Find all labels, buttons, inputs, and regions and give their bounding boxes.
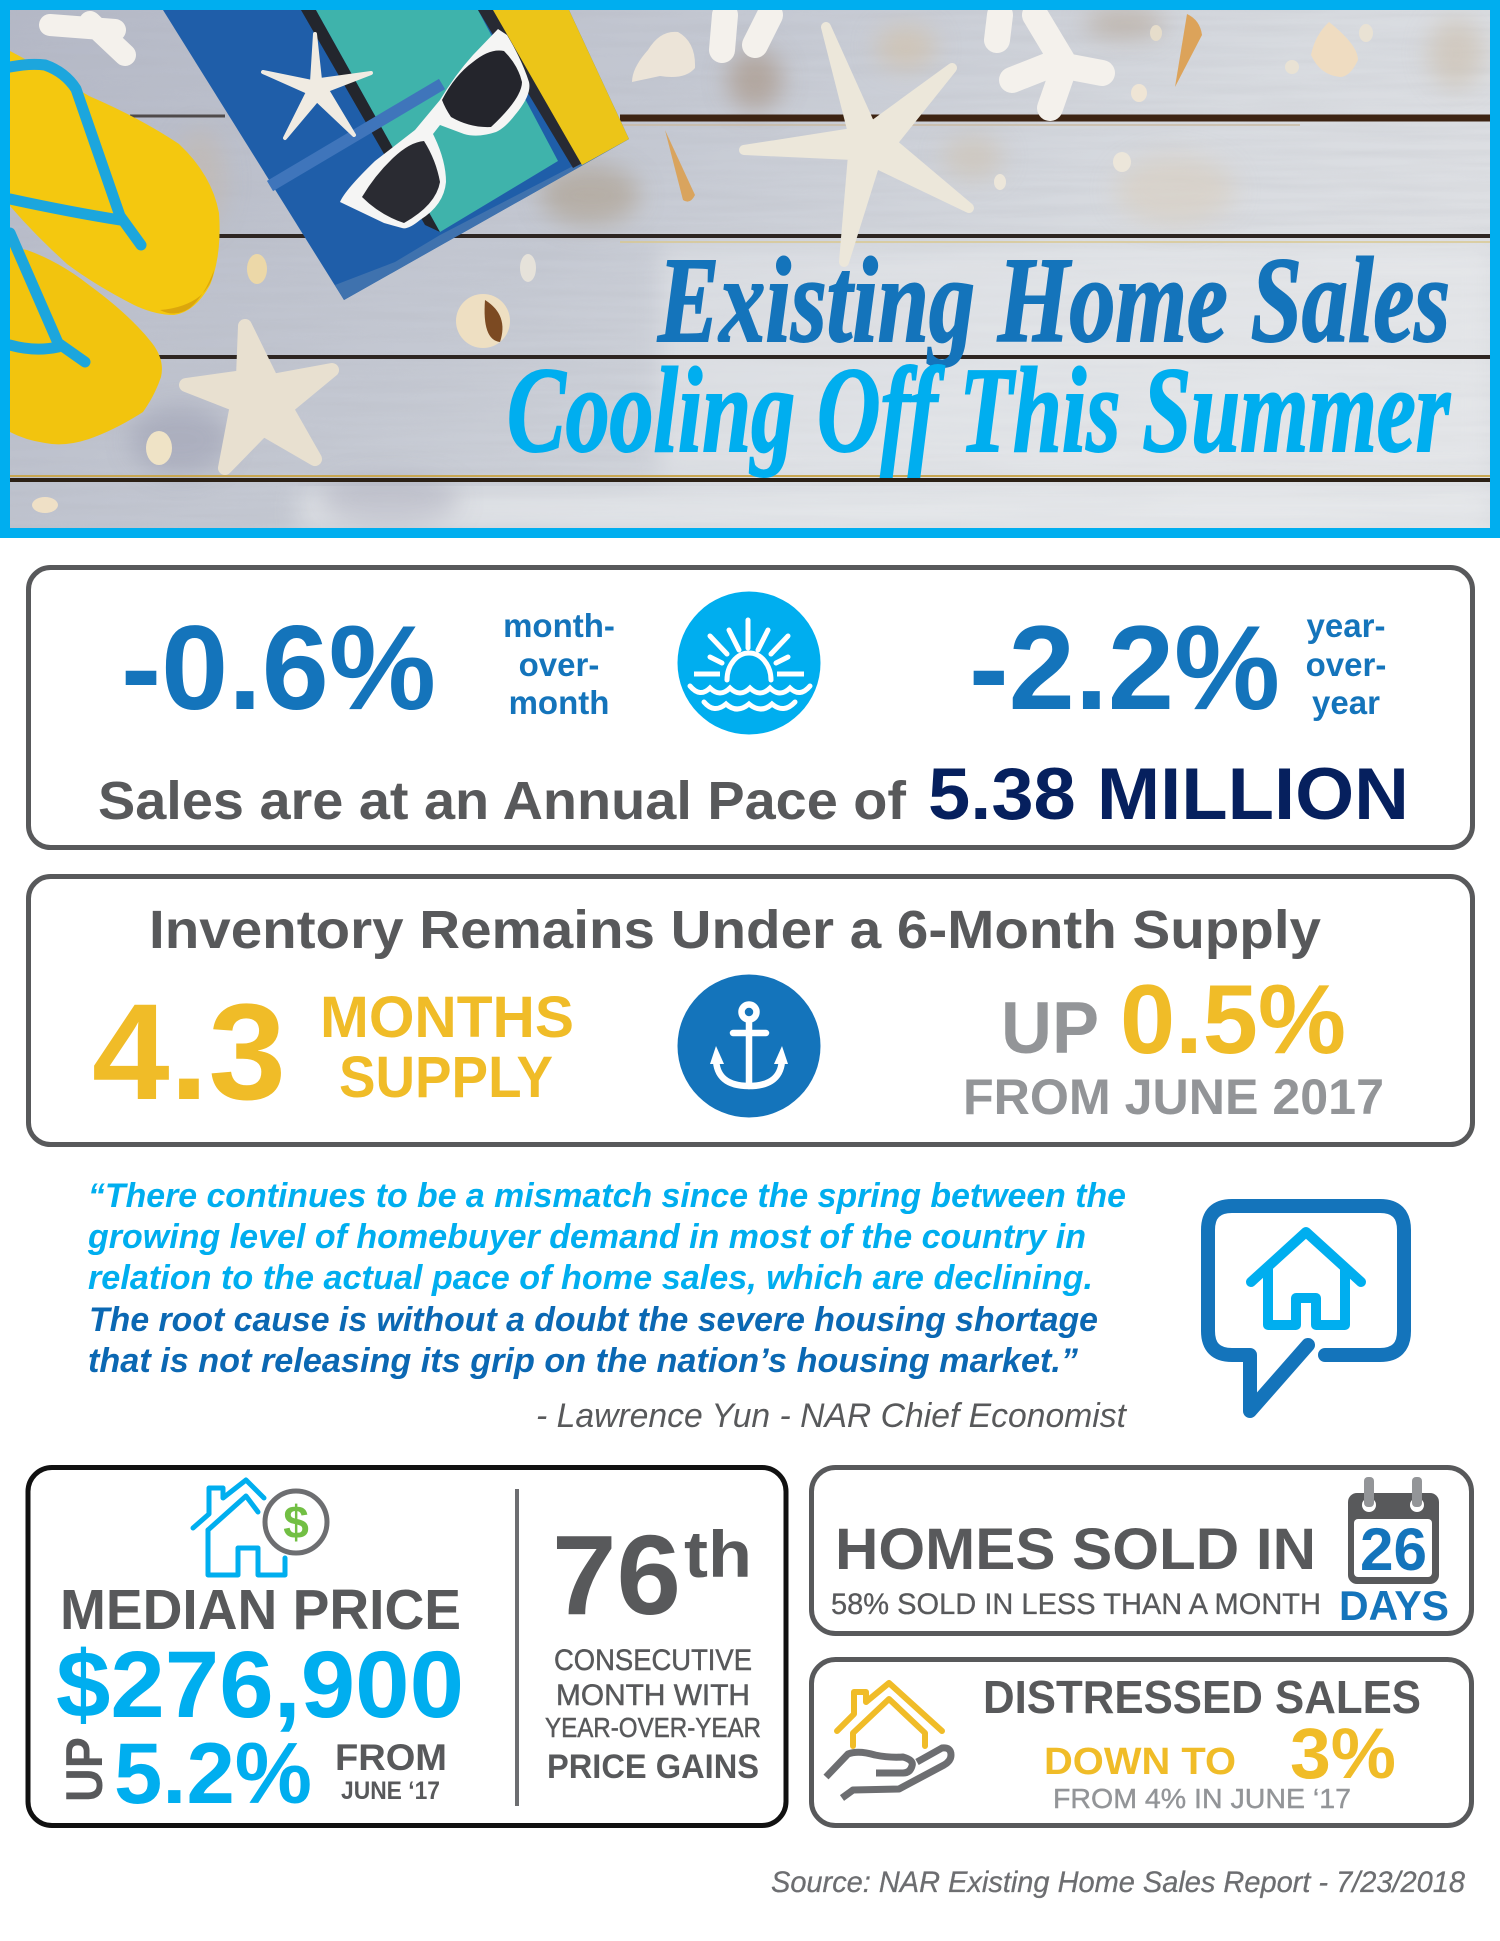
text: annual pace: Sales are at an Annual Pace of bbox=[98, 771, 907, 831]
starfish large bbox=[744, 27, 969, 262]
label: month-over-month: month bbox=[509, 684, 609, 721]
shells bbox=[32, 14, 1373, 513]
label: days: DAYS bbox=[1339, 1582, 1449, 1629]
towel bbox=[163, 10, 629, 300]
label: month-over-month: month- bbox=[503, 607, 615, 644]
icon: speech bubble with house bbox=[1208, 1206, 1404, 1411]
text: from 4%: FROM 4% IN JUNE ‘17 bbox=[1053, 1783, 1351, 1814]
label: months supply: SUPPLY bbox=[339, 1045, 553, 1110]
quote: The root cause is without a doubt the severe housing shortage bbox=[89, 1301, 1098, 1339]
icon: sun over water bbox=[678, 592, 820, 734]
stat: up 0.5% bbox=[1001, 964, 1346, 1074]
label: year-over-year: year- bbox=[1307, 607, 1385, 644]
panel: homes sold in 26 days bbox=[812, 1468, 1472, 1634]
label: down to: DOWN TO bbox=[1044, 1741, 1236, 1783]
label: from June '17 bbox=[335, 1737, 447, 1805]
panel: annual sales pace bbox=[28, 568, 1472, 848]
plank gaps bbox=[10, 116, 1490, 480]
header banner bbox=[0, 0, 1500, 538]
heading: homes sold in: HOMES SOLD IN bbox=[835, 1517, 1316, 1582]
label: from June '17: JUNE ‘17 bbox=[341, 1777, 440, 1805]
text: 58% sold: 58% SOLD IN LESS THAN A MONTH bbox=[831, 1588, 1321, 1621]
heading: distressed sales: DISTRESSED SALES bbox=[983, 1671, 1421, 1723]
label: consecutive: YEAR-OVER-YEAR bbox=[545, 1712, 761, 1743]
label: consecutive: PRICE GAINS bbox=[547, 1748, 759, 1786]
label: consecutive: CONSECUTIVE bbox=[554, 1644, 752, 1677]
coral group bbox=[50, 15, 1102, 108]
label: months supply: MONTHS bbox=[320, 985, 574, 1050]
icon: hand holding house bbox=[826, 1683, 951, 1798]
sand patches bbox=[130, 7, 1484, 525]
stat: 3%: 3% bbox=[1290, 1715, 1396, 1794]
icon: calendar: 26 bbox=[1360, 1516, 1427, 1583]
title bbox=[507, 233, 1451, 478]
attribution: - Lawrence Yun - NAR Chief Economist bbox=[536, 1397, 1128, 1435]
flip-flops bbox=[10, 51, 220, 444]
label: from June '17: FROM bbox=[335, 1737, 447, 1778]
stat: month over month: -0.6% bbox=[121, 601, 436, 735]
heading: median price: MEDIAN PRICE bbox=[60, 1578, 461, 1642]
label: from June 2017: FROM JUNE 2017 bbox=[963, 1069, 1384, 1125]
icon: calendar bbox=[1348, 1477, 1439, 1584]
stat: price: $276,900 bbox=[56, 1632, 464, 1738]
label: year-over-year: year bbox=[1312, 684, 1380, 721]
label: month-over-month: over- bbox=[519, 646, 599, 683]
label: up rotated: UP bbox=[56, 1737, 114, 1802]
starfish bottom left bbox=[186, 326, 332, 468]
label: consecutive: MONTH WITH bbox=[556, 1679, 750, 1712]
stat: 76th bbox=[552, 1512, 752, 1638]
starfish on towel bbox=[263, 34, 371, 138]
heading: inventory: Inventory Remains Under a 6-Month Supply bbox=[149, 900, 1321, 960]
panel: median price bbox=[28, 1468, 786, 1826]
icon: anchor bbox=[678, 974, 820, 1118]
quote: growing level of homebuyer demand in most of the country in bbox=[87, 1218, 1086, 1256]
stat: 5.38 million: 5.38 MILLION bbox=[928, 754, 1409, 835]
panel: distressed sales bbox=[812, 1660, 1472, 1826]
quote: that is not releasing its grip on the nation’s housing market.” bbox=[88, 1342, 1078, 1380]
stat: year over year: -2.2% bbox=[969, 601, 1280, 735]
stat: up 0.5%: UP bbox=[1001, 988, 1099, 1069]
stat: 4.3: 4.3 bbox=[92, 976, 286, 1129]
sunglasses bbox=[340, 29, 529, 228]
source: Source: NAR Existing Home Sales Report - 7/23/2018 bbox=[771, 1866, 1465, 1899]
stat: 76th: th bbox=[684, 1517, 752, 1591]
quote bbox=[87, 1177, 1128, 1435]
quote: “There continues to be a mismatch since the spring between the bbox=[88, 1177, 1126, 1215]
stat: 5.2%: 5.2% bbox=[114, 1726, 312, 1822]
label: months supply bbox=[320, 985, 574, 1110]
stat: up 0.5%: 0.5% bbox=[1120, 964, 1346, 1074]
quote: relation to the actual pace of home sales, which are declining. bbox=[88, 1259, 1093, 1297]
icon: house with dollar coin: $ bbox=[283, 1496, 309, 1548]
icon: house with dollar coin bbox=[193, 1480, 327, 1575]
label: consecutive bbox=[545, 1644, 761, 1786]
panel: inventory bbox=[28, 876, 1472, 1144]
label: year-over-year bbox=[1306, 607, 1386, 721]
label: month-over-month bbox=[503, 607, 615, 721]
label: year-over-year: over- bbox=[1306, 646, 1386, 683]
stat: 76th: 76 bbox=[552, 1512, 681, 1638]
